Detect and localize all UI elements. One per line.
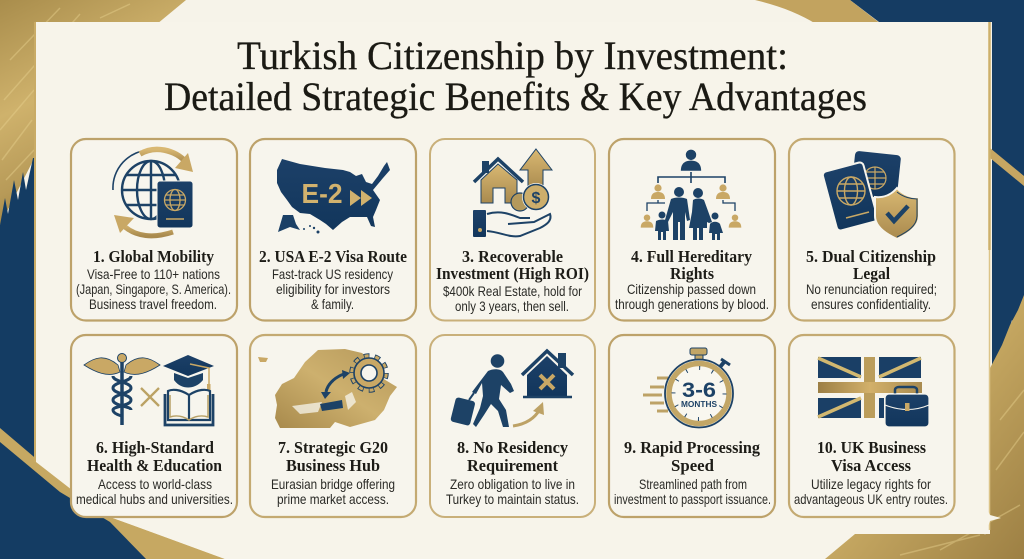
- panel: card 1 global mobility: 1. Global Mobility: [93, 247, 214, 266]
- panel: card 8 no residency: 8. No Residency: [457, 438, 568, 457]
- panel: card 6 health and education: Access to world-class: [98, 477, 212, 492]
- panel: card 2 USA E-2 visa: & family.: [311, 297, 354, 312]
- panel: card 5 dual citizenship: ensures confidentiality.: [811, 297, 931, 312]
- icon: stopwatch 3-6 months: 3-6: [682, 379, 716, 402]
- panel: card 4 hereditary rights: through generations by blood.: [615, 297, 769, 312]
- panel: card 8 no residency: [430, 335, 595, 517]
- panel: card 1 global mobility: (Japan, Singapore, S. America).: [76, 282, 231, 297]
- panel: card 3 recoverable investment: only 3 years, then sell.: [455, 299, 569, 314]
- panel: card 10 UK business visa: Visa Access: [831, 456, 911, 475]
- panel: card 1 global mobility: [71, 139, 237, 320]
- icon: USA map with E-2: [277, 159, 390, 234]
- panel: card 4 hereditary rights: 4. Full Hereditary: [631, 247, 752, 266]
- panel: card 5 dual citizenship: 5. Dual Citizenship: [806, 247, 936, 266]
- panel: card 6 health and education: 6. High-Standard: [96, 438, 215, 457]
- panel: card 7 G20 business hub: Eurasian bridge offering: [271, 477, 395, 492]
- sparkle: [966, 505, 1001, 535]
- panel: card 6 health and education: [71, 335, 237, 517]
- panel: card 4 hereditary rights: Rights: [670, 264, 714, 283]
- icon: stopwatch 3-6 months: [643, 348, 733, 428]
- panel: card 7 G20 business hub: [250, 335, 416, 517]
- title: Turkish Citizenship by Investment:: [237, 33, 788, 78]
- panel: card 7 G20 business hub: Business Hub: [286, 456, 380, 475]
- panel: card 6 health and education: Health & Education: [87, 456, 222, 475]
- panel: card 7 G20 business hub: prime market access.: [277, 492, 389, 507]
- icon: house, coins and hand: $: [532, 190, 541, 207]
- icon: union flag and briefcase: [818, 357, 929, 427]
- panel: card 7 G20 business hub: 7. Strategic G20: [278, 438, 388, 457]
- panel: card 10 UK business visa: advantageous UK entry routes.: [794, 492, 948, 507]
- panel: card 9 rapid processing: 9. Rapid Processing: [624, 438, 760, 457]
- icon: gold map with gear and arrows: [258, 349, 397, 428]
- panel: card 8 no residency: Requirement: [467, 456, 558, 475]
- icon: stopwatch 3-6 months: MONTHS: [681, 399, 717, 409]
- icon: caduceus, graduation cap and book: [84, 354, 214, 425]
- panel: card 2 USA E-2 visa: 2. USA E-2 Visa Route: [259, 247, 407, 266]
- panel: card 9 rapid processing: [609, 335, 775, 517]
- panel: card 5 dual citizenship: Legal: [853, 264, 890, 283]
- panel: card 5 dual citizenship: No renunciation required;: [806, 282, 937, 297]
- panel: card 3 recoverable investment: 3. Recoverable: [462, 247, 563, 266]
- panel: card 3 recoverable investment: Investment (High ROI): [436, 264, 589, 283]
- panel: card 3 recoverable investment: [430, 139, 595, 320]
- icon: globe and passport: [113, 149, 193, 236]
- icon: house, coins and hand: [473, 149, 552, 237]
- panel: card 8 no residency: Zero obligation to live in: [450, 477, 575, 492]
- panel: card 3 recoverable investment: $400k Real Estate, hold for: [443, 284, 582, 299]
- panel: card 9 rapid processing: Speed: [671, 456, 715, 475]
- icon: walking traveller, house and arrow: [450, 351, 573, 427]
- panel: card 5 dual citizenship: [789, 139, 954, 320]
- panel: card 4 hereditary rights: [609, 139, 775, 320]
- panel: card 10 UK business visa: Utilize legacy rights for: [811, 477, 931, 492]
- panel: card 6 health and education: medical hubs and universities.: [76, 492, 233, 507]
- panel: card 9 rapid processing: Streamlined path from: [639, 477, 747, 492]
- panel: card 4 hereditary rights: Citizenship passed down: [627, 282, 756, 297]
- panel: card 10 UK business visa: 10. UK Business: [817, 438, 926, 457]
- panel: card 8 no residency: Turkey to maintain status.: [446, 492, 579, 507]
- panel: card 2 USA E-2 visa: eligibility for investors: [276, 282, 390, 297]
- icon: family tree: [641, 150, 741, 240]
- panel: card 9 rapid processing: investment to passport issuance.: [614, 492, 771, 507]
- panel: card 2 USA E-2 visa: Fast-track US residency: [272, 267, 393, 282]
- panel: card 1 global mobility: Visa-Free to 110+ nations: [87, 267, 220, 282]
- icon: USA map with E-2: E-2: [302, 178, 342, 209]
- panel: card 10 UK business visa: [789, 335, 954, 517]
- panel: card 1 global mobility: Business travel freedom.: [89, 297, 217, 312]
- title: [164, 33, 867, 119]
- icon: passports and shield: [822, 151, 919, 239]
- title: Detailed Strategic Benefits & Key Advantages: [164, 74, 867, 119]
- panel: card 2 USA E-2 visa: [250, 139, 416, 320]
